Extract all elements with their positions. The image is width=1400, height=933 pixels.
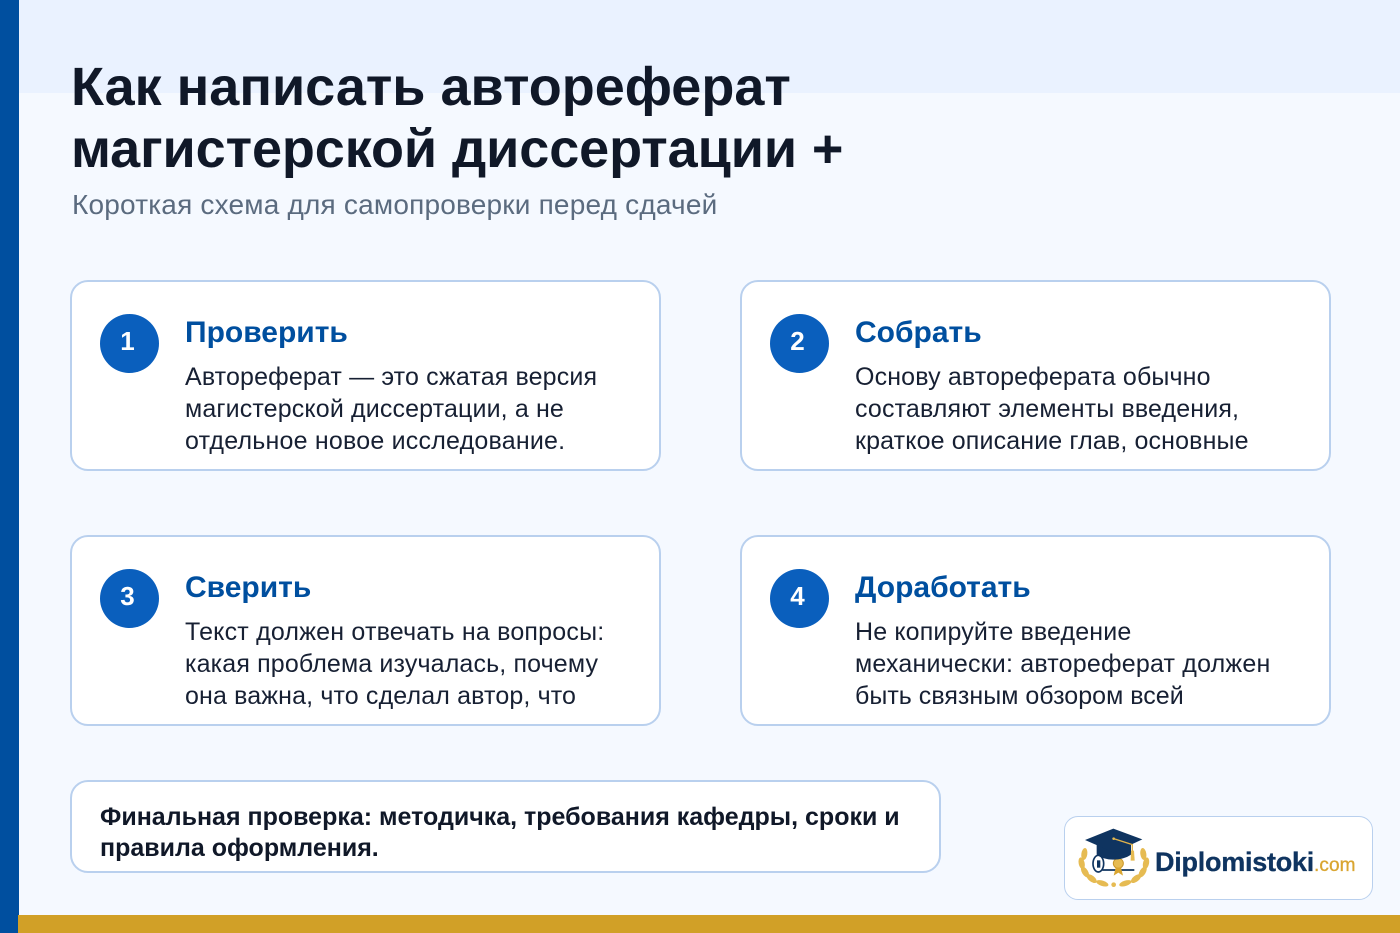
text: step 2: составляют элементы введения, bbox=[855, 395, 1239, 423]
heading: Доработать: Доработать bbox=[855, 571, 1031, 604]
panel: step 3 bbox=[70, 535, 661, 726]
title: Как написать автореферат bbox=[71, 57, 791, 117]
text: step 2: краткое описание глав, основные bbox=[855, 427, 1249, 455]
heading: Собрать: Собрать bbox=[855, 316, 982, 349]
step number 3 bbox=[100, 569, 159, 628]
panel: step 1 bbox=[70, 280, 661, 471]
text: step 3: Текст должен отвечать на вопросы: bbox=[185, 618, 604, 646]
bottom gold bar bbox=[18, 915, 1400, 933]
step number 1: 1 bbox=[120, 326, 135, 356]
text: step 1: магистерской диссертации, а не bbox=[185, 395, 564, 423]
text: step 1: отдельное новое исследование. bbox=[185, 427, 565, 455]
text: step 2: Основу автореферата обычно bbox=[855, 363, 1211, 391]
callout: final check bbox=[70, 780, 941, 873]
step number 4 bbox=[770, 569, 829, 628]
text: step 3 bbox=[185, 618, 604, 710]
panel: step 4 bbox=[740, 535, 1331, 726]
text: step 4: Не копируйте введение bbox=[855, 618, 1131, 646]
text: step 4: быть связным обзором всей bbox=[855, 682, 1184, 710]
text: step 3: какая проблема изучалась, почему bbox=[185, 650, 598, 678]
step number 1 bbox=[100, 314, 159, 373]
top band bbox=[0, 0, 1400, 93]
heading: Проверить: Проверить bbox=[185, 316, 348, 349]
text: step 2 bbox=[855, 363, 1249, 455]
heading: Сверить: Сверить bbox=[185, 571, 311, 604]
text: step 4 bbox=[855, 618, 1270, 710]
callout: final check: Финальная проверка: методичка, требования кафедры, сроки и bbox=[100, 803, 900, 831]
step number 2: 2 bbox=[790, 326, 805, 356]
title: магистерской диссертации + bbox=[71, 119, 843, 179]
step number 2 bbox=[770, 314, 829, 373]
callout: final check: правила оформления. bbox=[100, 834, 379, 862]
panel: step 2 bbox=[740, 280, 1331, 471]
text: step 1: Автореферат — это сжатая версия bbox=[185, 363, 597, 391]
subtitle: Короткая схема для самопроверки перед сдачей bbox=[72, 189, 717, 220]
step number 3: 3 bbox=[120, 581, 135, 611]
title bbox=[71, 57, 843, 179]
text: step 3: она важна, что сделал автор, что bbox=[185, 682, 576, 710]
text: step 1 bbox=[185, 363, 597, 455]
step number 4: 4 bbox=[790, 581, 805, 611]
logo: Diplomistoki.com bbox=[1064, 816, 1373, 900]
left accent bar bbox=[0, 0, 19, 933]
text: step 4: механически: автореферат должен bbox=[855, 650, 1270, 678]
icon: graduation cap with laurel bbox=[1078, 828, 1150, 887]
wordmark: Diplomistoki.com bbox=[1155, 847, 1356, 877]
